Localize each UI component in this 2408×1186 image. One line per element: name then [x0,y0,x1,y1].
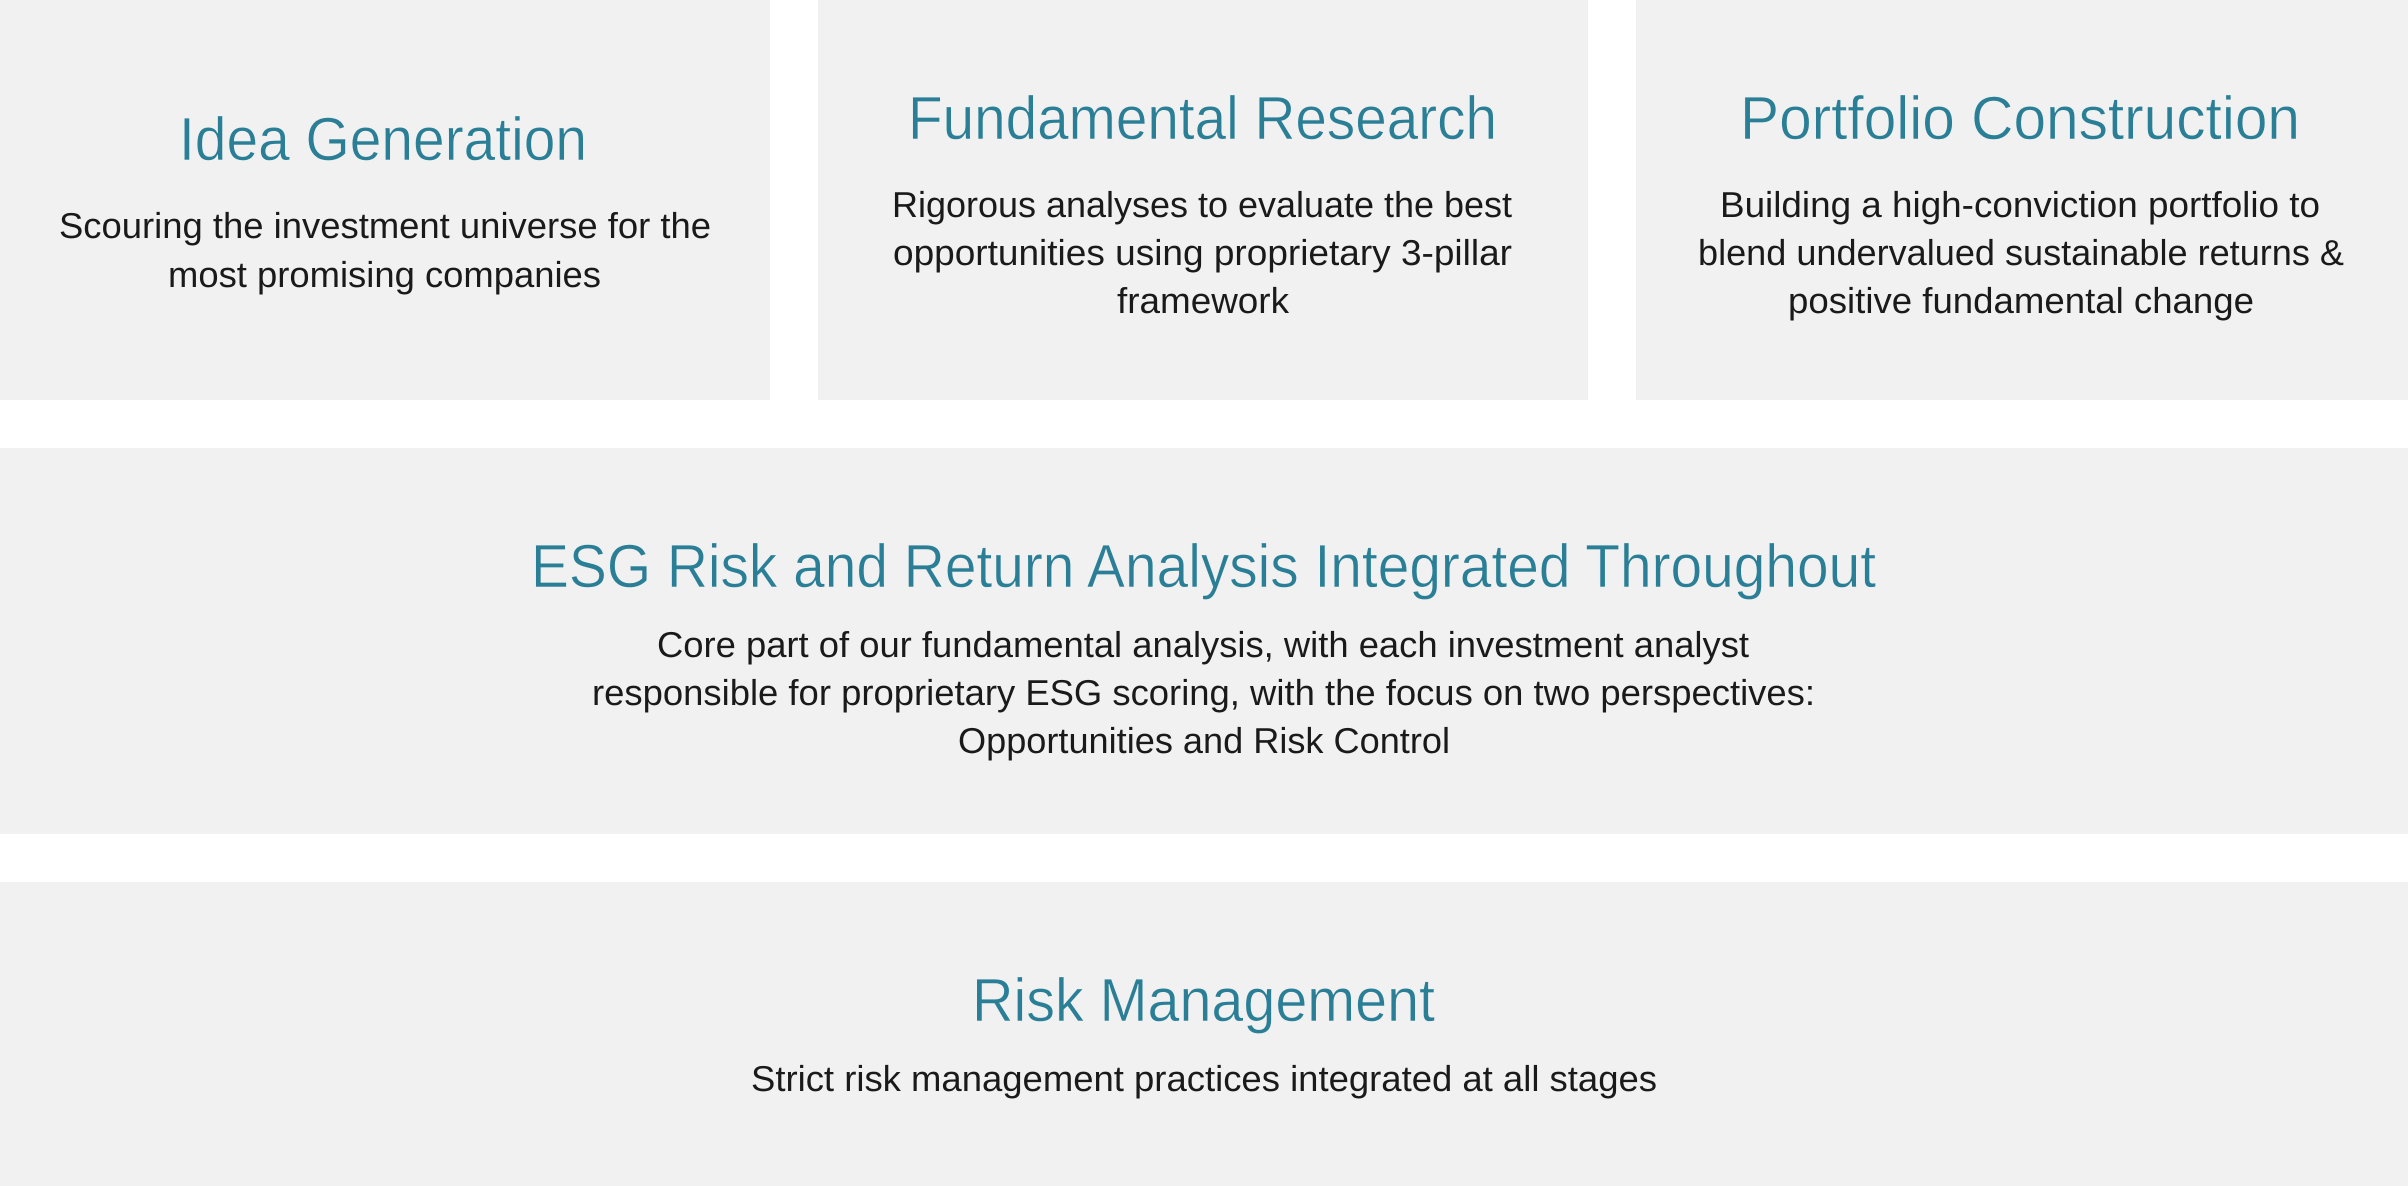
panel: risk management [0,882,2408,1186]
text block: portfolio construction description [1698,184,2344,321]
heading: esg risk and return analysis: ESG Risk and Return Analysis Integrated Throughout [531,532,1876,600]
text block: idea generation description: Scouring the investment universe for the [59,205,711,246]
text block: portfolio construction description: Building a high-conviction portfolio to [1720,184,2320,225]
text block: fundamental research description: opportunities using proprietary 3-pillar [893,232,1512,273]
text block: fundamental research description [892,184,1512,321]
heading: portfolio construction: Portfolio Construction [1740,84,2300,152]
text block: portfolio construction description: blend undervalued sustainable returns & [1698,232,2344,273]
text block: idea generation description: most promising companies [168,254,601,295]
text block: fundamental research description: Rigorous analyses to evaluate the best [892,184,1512,225]
text block: esg description: responsible for proprietary ESG scoring, with the focus on two perspectives: [592,672,1815,713]
heading: risk management: Risk Management [972,966,1435,1034]
text block: idea generation description [59,205,711,295]
text block: portfolio construction description: positive fundamental change [1788,280,2254,321]
text block: esg description [592,624,1815,761]
text block: risk management description: Strict risk management practices integrated at all stages [751,1058,1657,1099]
heading: idea generation: Idea Generation [179,105,587,173]
panel: fundamental research [818,0,1588,400]
text block: esg description: Core part of our fundamental analysis, with each investment analyst [657,624,1749,665]
panel: esg risk and return analysis [0,448,2408,834]
panel: portfolio construction [1636,0,2408,400]
heading: fundamental research: Fundamental Research [908,84,1497,152]
text block: fundamental research description: framework [1117,280,1290,321]
panel: idea generation [0,0,770,400]
text block: esg description: Opportunities and Risk Control [958,720,1450,761]
